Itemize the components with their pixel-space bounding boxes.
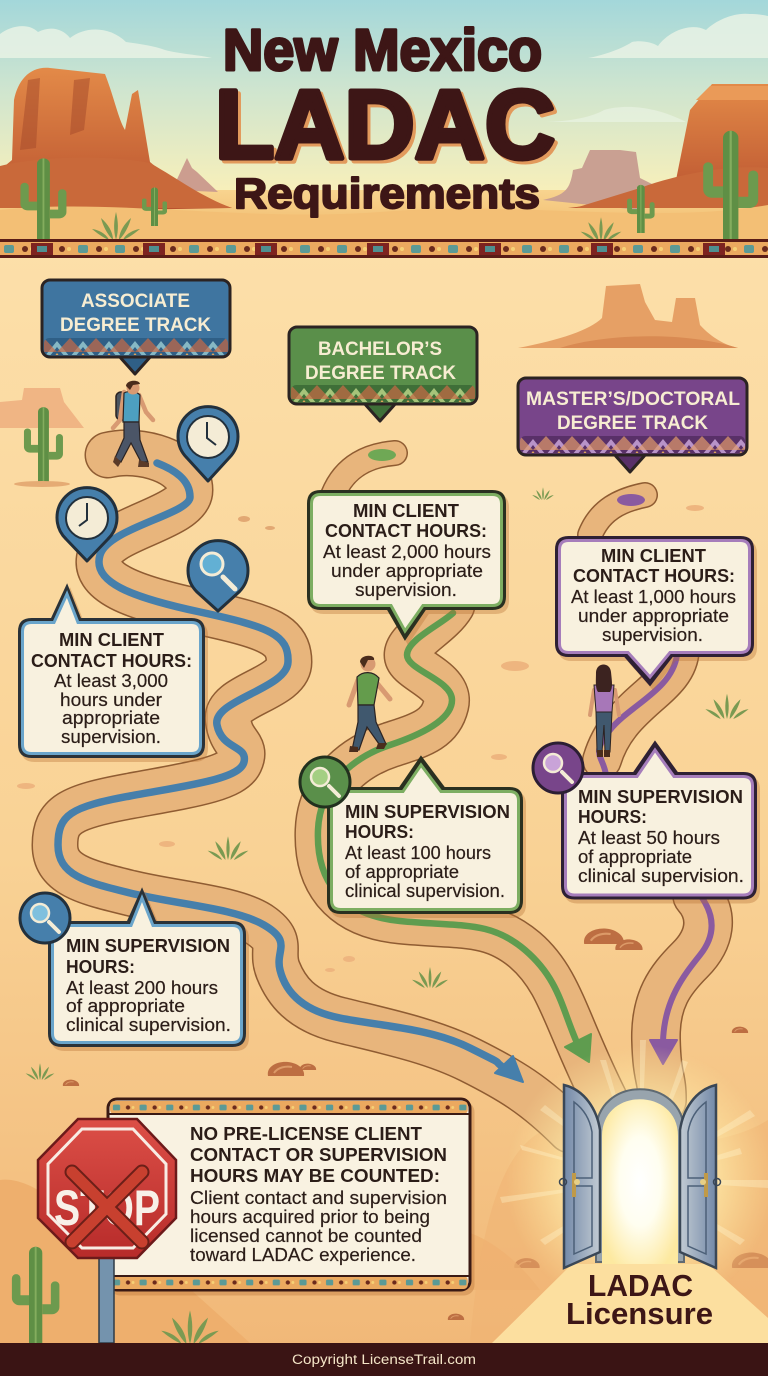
callout: bachelor's client contact hours: MIN CLIENT — [353, 500, 460, 521]
callout: master's supervision hours: of appropriate — [578, 846, 692, 867]
banner: master's/doctoral degree track: MASTER’S/DOCTORAL — [526, 388, 740, 410]
warning panel: hours acquired prior to being — [190, 1206, 430, 1227]
light floor — [492, 1264, 768, 1343]
pin: clock 2 — [57, 488, 117, 561]
title line: LADAC: LADAC — [218, 73, 558, 182]
banner: associate degree track: DEGREE TRACK — [60, 314, 211, 336]
green trail line — [318, 613, 578, 1045]
callout: bachelor's client contact hours: supervision. — [355, 579, 457, 600]
banner: associate degree track — [42, 280, 230, 374]
callout: bachelor's client contact hours: under appropriate — [331, 560, 483, 581]
banner: associate degree track: ASSOCIATE — [81, 290, 190, 312]
banner: master's/doctoral degree track: DEGREE TRACK — [557, 412, 708, 434]
left cactus — [24, 407, 63, 482]
callout: master's client contact hours: under appropriate — [578, 605, 729, 626]
footer: Copyright LicenseTrail.com — [292, 1352, 476, 1367]
callout: associate client contact hours: appropriate — [62, 707, 160, 728]
callout: bachelor's client contact hours: CONTACT HOURS: — [325, 520, 487, 541]
light rays — [500, 1040, 768, 1245]
callout: master's supervision hours: HOURS: — [578, 806, 647, 827]
banner: master's/doctoral degree track — [518, 378, 747, 472]
left mesa — [0, 388, 84, 428]
callout: associate supervision hours — [50, 891, 244, 1046]
banner: bachelor's degree track: BACHELOR’S — [318, 338, 442, 360]
callout: associate supervision hours: of appropriate — [66, 995, 185, 1016]
hiker: master's track — [590, 664, 619, 757]
bottom dunes — [0, 1180, 250, 1343]
blue arrowhead — [495, 1056, 523, 1082]
pin: magnifier — [188, 541, 248, 611]
callout: associate client contact hours: At least 3,000 — [54, 670, 168, 691]
callout: associate supervision hours: HOURS: — [66, 956, 135, 977]
callout: master's client contact hours: supervision. — [602, 624, 703, 645]
header desert scene — [0, 0, 768, 244]
light glow — [505, 1045, 768, 1315]
licensure label: Licensure — [566, 1296, 713, 1331]
footer — [0, 1343, 768, 1376]
bottom cactus — [12, 1247, 59, 1343]
warning panel: Client contact and supervision — [190, 1187, 447, 1208]
sand dunes — [0, 205, 768, 242]
callout: bachelor's client contact hours — [308, 492, 504, 638]
pin: clock 1 — [178, 407, 238, 481]
magnifier badge: master's — [533, 743, 583, 793]
stop sign with red x: STOP — [54, 1180, 160, 1236]
title line: LADAC: LADAC — [215, 70, 555, 179]
licensure doorway — [492, 1040, 768, 1343]
trail: master's degree — [590, 494, 712, 1100]
scattered plants and rocks — [208, 836, 248, 860]
callout: bachelor's supervision hours: At least 100 hours — [345, 842, 491, 863]
callout: master's client contact hours — [556, 538, 752, 684]
warning panel: HOURS MAY BE COUNTED: — [190, 1165, 440, 1186]
header decorative band — [0, 239, 768, 258]
desert background scenery — [0, 284, 768, 1344]
top right mesa — [518, 284, 738, 348]
callout: associate supervision hours: MIN SUPERVISION — [66, 935, 230, 956]
callout: associate client contact hours: hours under — [60, 689, 162, 710]
title — [215, 18, 558, 218]
callout: bachelor's client contact hours: At least 2,000 hours — [323, 541, 491, 562]
callout: associate supervision hours: At least 200 hours — [66, 977, 218, 998]
trail: associate degree — [55, 453, 570, 1130]
trail: bachelor's degree — [318, 449, 605, 1100]
licensure label: LADAC — [588, 1268, 693, 1303]
trail start marker — [617, 494, 645, 506]
magnifier badge: bachelor's — [300, 757, 350, 807]
hiker: bachelor's track — [349, 656, 390, 752]
header cacti — [20, 158, 66, 244]
doorway arch — [596, 1089, 684, 1262]
pale mesas — [172, 158, 218, 192]
licensure label — [566, 1268, 713, 1331]
clouds — [0, 14, 768, 122]
title line: Requirements: Requirements — [234, 170, 540, 218]
callout: bachelor's supervision hours: clinical supervision. — [345, 880, 505, 901]
callout: associate client contact hours: MIN CLIENT — [59, 629, 165, 650]
callout: associate client contact hours: supervision. — [61, 726, 161, 747]
trail start marker — [368, 449, 396, 461]
callout: bachelor's supervision hours: of appropriate — [345, 861, 459, 882]
right butte — [568, 84, 768, 208]
callout: bachelor's supervision hours: HOURS: — [345, 821, 414, 842]
callout: master's supervision hours: MIN SUPERVISION — [578, 786, 743, 807]
header agaves — [92, 212, 140, 240]
warning panel — [108, 1099, 470, 1290]
callout: associate supervision hours: clinical supervision. — [66, 1014, 231, 1035]
warning panel: CONTACT OR SUPERVISION — [190, 1144, 447, 1165]
bottom agave — [161, 1310, 219, 1344]
callout: master's supervision hours: At least 50 hours — [578, 827, 720, 848]
purple trail line — [599, 655, 712, 1042]
blue trail line — [58, 463, 504, 1068]
hiker: associate track — [113, 381, 153, 467]
callout: master's supervision hours — [562, 743, 756, 898]
callout: master's client contact hours: MIN CLIENT — [601, 545, 707, 566]
stop sign with red x — [38, 1119, 176, 1343]
callout: bachelor's supervision hours — [328, 758, 522, 912]
green arrowhead — [565, 1034, 591, 1062]
page background — [0, 250, 768, 1350]
banner: bachelor's degree track — [289, 327, 477, 421]
left door — [564, 1085, 600, 1268]
warning panel: licensed cannot be counted — [190, 1225, 422, 1246]
callout: master's client contact hours: At least 1,000 hours — [571, 586, 736, 607]
left butte — [0, 68, 232, 210]
callout: bachelor's supervision hours: MIN SUPERVISION — [345, 801, 510, 822]
warning panel: toward LADAC experience. — [190, 1244, 416, 1265]
callout: master's client contact hours: CONTACT HOURS: — [573, 565, 735, 586]
warning panel: NO PRE-LICENSE CLIENT — [190, 1123, 423, 1144]
callout: associate client contact hours — [20, 587, 204, 756]
purple arrowhead — [650, 1040, 677, 1064]
callout: master's supervision hours: clinical supervision. — [578, 865, 744, 886]
right door — [680, 1085, 716, 1268]
title line: New Mexico: New Mexico — [223, 18, 542, 83]
banner: bachelor's degree track: DEGREE TRACK — [305, 362, 456, 384]
callout: associate client contact hours: CONTACT HOURS: — [31, 650, 192, 671]
magnifier badge: associate — [20, 893, 70, 943]
